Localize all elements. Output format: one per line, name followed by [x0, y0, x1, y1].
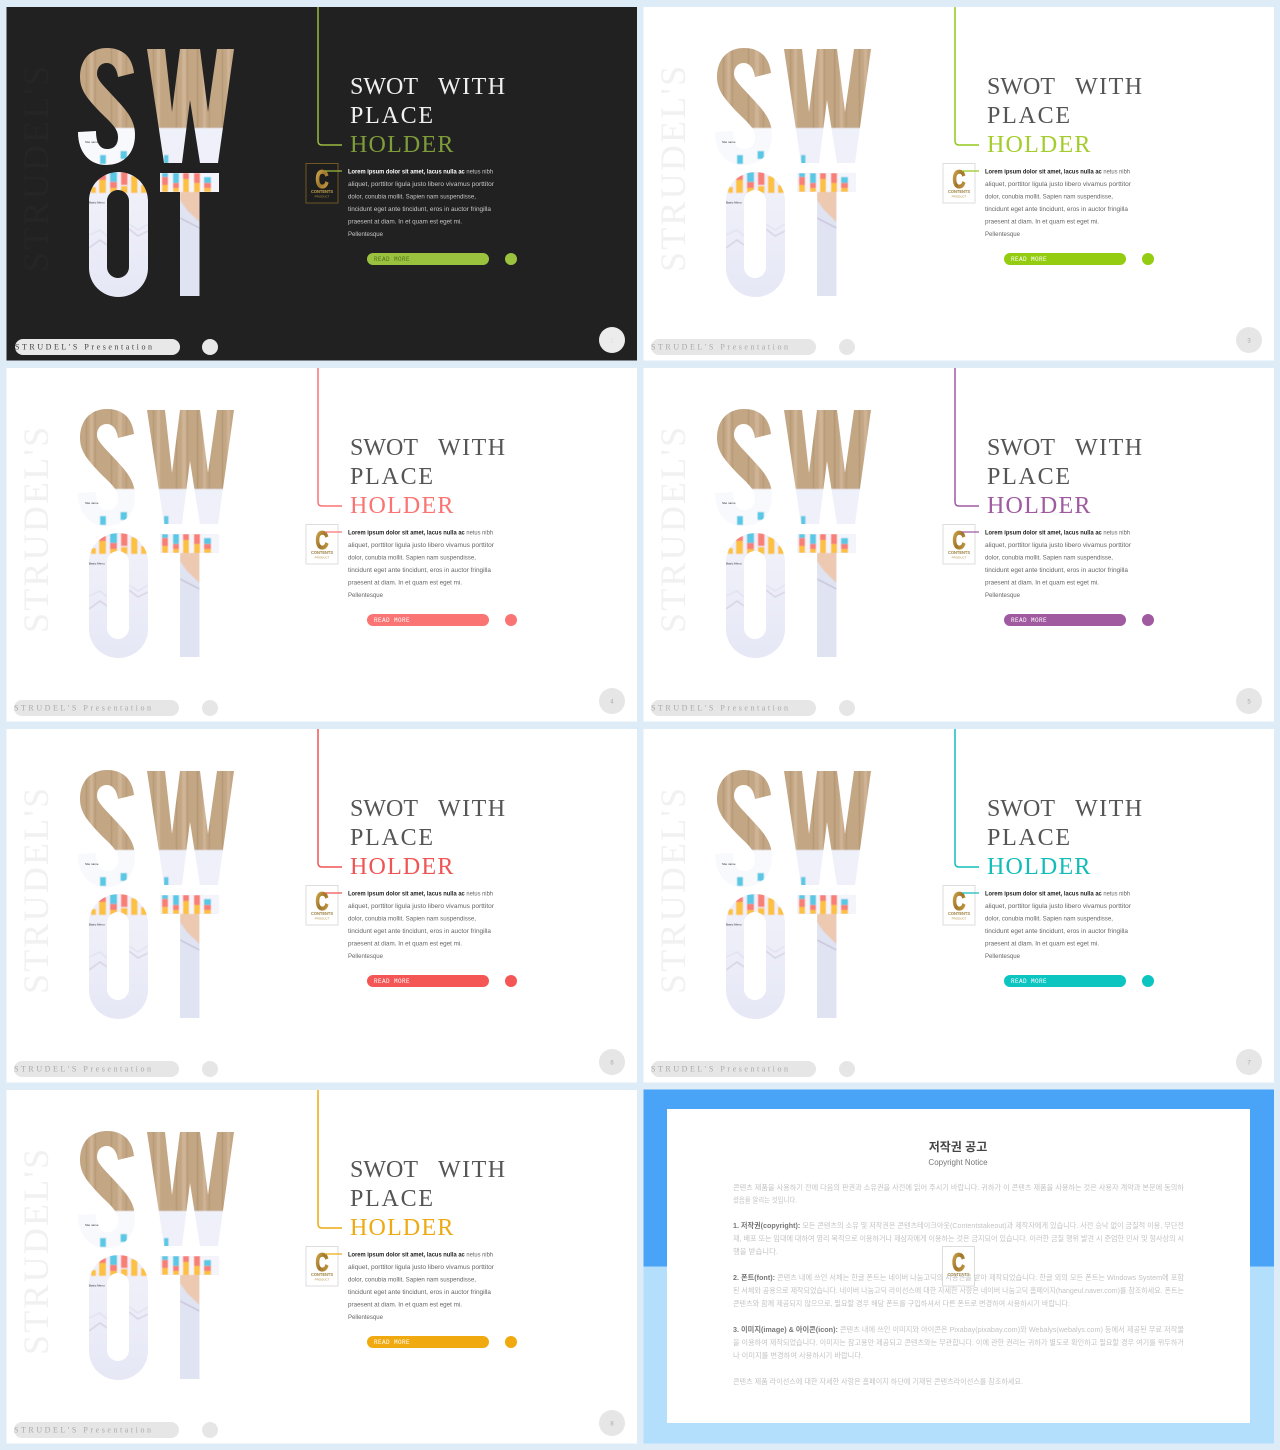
accent connector [955, 729, 979, 867]
body text: Pellentesque [348, 592, 384, 599]
logo: PRODUCT [952, 916, 967, 920]
title: PLACE [987, 103, 1072, 129]
title: SWOT [350, 435, 418, 461]
read more button [367, 1336, 489, 1348]
body text [348, 1252, 494, 1321]
chart label: Basic Menu [89, 200, 105, 204]
read more button [1004, 975, 1126, 987]
logo: C [316, 887, 329, 916]
title [987, 435, 1144, 519]
image and icon clause [733, 1324, 1184, 1360]
logo: CONTENTS [311, 550, 333, 555]
accent dot [1142, 253, 1154, 265]
body text: tincidunt eget ante tincidunt, eros in auctor fringilla [985, 928, 1129, 935]
SWOT image letters [707, 401, 882, 664]
title [350, 74, 507, 158]
title: SWOT [987, 796, 1055, 822]
slide 4: purple [644, 368, 1274, 722]
body text: praesent at diam. In et quam est eget mi. [348, 1302, 462, 1308]
page number [599, 1410, 625, 1436]
chart label: Basic Menu [726, 200, 742, 204]
logo: C [316, 1248, 329, 1277]
accent connector [955, 368, 979, 506]
read more button: READ MORE [374, 1339, 410, 1346]
body text [985, 890, 1131, 960]
accent connector [318, 1090, 342, 1228]
footer pill [15, 339, 180, 355]
read more button: READ MORE [374, 978, 410, 985]
title: PLACE [350, 103, 435, 129]
chart label: Basic Menu [726, 562, 742, 566]
body text: Lorem ipsum dolor sit amet, lacus nulla ac netus nibh [348, 890, 494, 898]
body text: Pellentesque [348, 231, 384, 238]
logo: PRODUCT [315, 916, 330, 920]
read more button [367, 975, 489, 987]
title: PLACE [350, 464, 435, 490]
title: SWOT [350, 1157, 418, 1183]
page number [1236, 1049, 1262, 1075]
footer dot [202, 1422, 218, 1438]
body text: Pellentesque [985, 953, 1021, 960]
title: WITH [438, 74, 507, 100]
copyright clause: 1. 저작권(copyright): 모든 콘텐츠의 소유 및 저작권은 콘텐츠테이크아웃(Contentstakeout)과 제작자에게 있습니다. 사전 승낙 없이 금칠적 이용, 무단전 [733, 1220, 1184, 1230]
body text: aliquet, porttitor ligula justo libero vivamus porttitor [348, 903, 494, 910]
vertical watermark: STRUDEL'S [653, 64, 693, 272]
footer pill [14, 1422, 179, 1438]
title: PLACE [350, 825, 435, 851]
slide 1: dark olive [6, 7, 637, 360]
body text: tincidunt eget ante tincidunt, eros in auctor fringilla [348, 206, 492, 213]
blue top band [644, 1090, 1274, 1266]
read more button: READ MORE [374, 617, 410, 624]
read more button [1004, 253, 1126, 265]
title: PLACE [987, 464, 1072, 490]
accent connector [318, 729, 342, 867]
footer pill [651, 1061, 816, 1077]
title: SWOT [987, 435, 1055, 461]
chart label: Site name [85, 862, 99, 866]
chart label: Site name [722, 501, 736, 505]
SWOT image letters [707, 762, 882, 1025]
accent connector [318, 368, 342, 506]
logo: C [316, 526, 329, 555]
logo [943, 886, 975, 925]
logo: PRODUCT [315, 1278, 330, 1282]
title: WITH [438, 796, 507, 822]
logo [306, 1246, 338, 1286]
body text: praesent at diam. In et quam est eget mi. [348, 940, 462, 948]
chart label: Site name [722, 140, 736, 144]
page number: 3 [1247, 338, 1251, 344]
logo: C [316, 165, 329, 194]
body text [985, 530, 1131, 599]
chart label: Basic Menu [89, 1284, 105, 1288]
logo: PRODUCT [952, 194, 967, 198]
body text: praesent at diam. In et quam est eget mi. [985, 218, 1099, 226]
vertical watermark: STRUDEL'S [16, 1147, 56, 1355]
vertical watermark: STRUDEL'S [16, 786, 56, 994]
logo: CONTENTS [948, 911, 970, 916]
title [350, 796, 507, 880]
image and icon clause: 3. 이미지(image) & 아이콘(icon): 콘텐츠 내에 쓰인 이미지와 아이콘은 Pixabay(pixabay.com)와 Webalys(webalys.com) 등에서 제공된 무료 저작물 [733, 1324, 1184, 1334]
body text: dolor, conubia mollit. Sapien nam suspendisse, [985, 194, 1113, 200]
chart label: Site name [85, 140, 99, 144]
accent dot [505, 975, 517, 987]
logo [306, 164, 338, 203]
footer pill [651, 700, 816, 716]
body text: dolor, conubia mollit. Sapien nam suspendisse, [985, 916, 1113, 922]
logo lead line [325, 531, 342, 533]
chart label: Basic Menu [726, 922, 742, 926]
vertical watermark: STRUDEL'S [16, 64, 56, 272]
intro paragraph [733, 1182, 1184, 1204]
intro paragraph: 콘텐츠 제품을 사용하기 전에 다음의 판권과 소유권을 사전에 읽어 주시기 바랍니다. 귀하가 이 콘텐츠 제품을 사용하는 것은 사용자 계약과 본문에 동의하 [733, 1182, 1184, 1192]
body text: Pellentesque [985, 592, 1021, 599]
logo: C [952, 1248, 965, 1277]
footer pill: STRUDEL'S Presentation [14, 704, 151, 712]
body text [985, 168, 1131, 238]
slide 6: teal [644, 729, 1274, 1082]
logo: PRODUCT [315, 194, 330, 198]
footer pill: STRUDEL'S Presentation [651, 1064, 788, 1074]
body text: aliquet, porttitor ligula justo libero vivamus porttitor [348, 542, 494, 549]
accent connector [318, 7, 342, 145]
body text: Lorem ipsum dolor sit amet, lacus nulla ac netus nibh [348, 168, 494, 176]
footer pill: STRUDEL'S Presentation [15, 342, 152, 352]
body text: Lorem ipsum dolor sit amet, lacus nulla ac netus nibh [348, 530, 494, 536]
footer dot [839, 339, 855, 355]
footer pill: STRUDEL'S Presentation [14, 1064, 151, 1074]
notice title: 저작권 공고 [929, 1139, 987, 1154]
body text: aliquet, porttitor ligula justo libero vivamus porttitor [985, 181, 1131, 188]
copyright clause: 재, 배포 또는 임대에 대하여 영리 목적으로 이용하거나 제삼자에게 이용하는 것은 금지되어 있습니다. 이러한 금칠 행위 발견 시 준엄한 민사 및 형사상의 시 [733, 1233, 1184, 1243]
logo: C [953, 165, 966, 194]
SWOT image letters [70, 1123, 245, 1386]
read more button: READ MORE [1011, 256, 1047, 263]
title: WITH [1075, 435, 1144, 461]
body text: tincidunt eget ante tincidunt, eros in auctor fringilla [348, 1289, 492, 1296]
body text: dolor, conubia mollit. Sapien nam suspendisse, [348, 554, 476, 562]
footer dot [202, 339, 218, 355]
read more button: READ MORE [1011, 617, 1047, 624]
footer pill: STRUDEL'S Presentation [14, 1426, 151, 1434]
page number: 2 [610, 338, 614, 344]
footer pill [14, 700, 179, 716]
slide 8: copyright notice [644, 1090, 1274, 1444]
title [987, 796, 1144, 880]
body text: Pellentesque [985, 231, 1021, 238]
accent connector [955, 7, 979, 145]
body text: dolor, conubia mollit. Sapien nam suspendisse, [348, 916, 476, 922]
footer dot [839, 1061, 855, 1077]
page number: 7 [1247, 1060, 1251, 1066]
body text: dolor, conubia mollit. Sapien nam suspendisse, [985, 554, 1113, 562]
title: HOLDER [987, 493, 1092, 519]
body text: tincidunt eget ante tincidunt, eros in auctor fringilla [348, 928, 492, 935]
body text: dolor, conubia mollit. Sapien nam suspendisse, [348, 194, 476, 200]
logo: CONTENTS [311, 1272, 333, 1277]
body text: aliquet, porttitor ligula justo libero vivamus porttitor [985, 542, 1131, 549]
title [987, 74, 1144, 158]
logo: CONTENTS [948, 1272, 970, 1277]
logo lead line [962, 531, 979, 533]
font clause: 2. 폰트(font): 콘텐츠 내에 쓰인 서체는 한글 폰트는 네이버 나눔고딕의 사용권을 받아 제작되었습니다. 한글 외의 모든 폰트는 Windows System에 포함 [733, 1272, 1184, 1282]
title: HOLDER [350, 1215, 455, 1241]
SWOT image letters [70, 762, 245, 1025]
body text: tincidunt eget ante tincidunt, eros in auctor fringilla [985, 206, 1129, 213]
title: HOLDER [987, 132, 1092, 158]
logo: CONTENTS [948, 189, 970, 194]
slide 3: salmon [6, 368, 637, 722]
accent dot [505, 253, 517, 265]
logo: CONTENTS [948, 550, 970, 555]
chart label: Site name [85, 501, 99, 505]
title: SWOT [987, 74, 1055, 100]
logo [943, 524, 975, 564]
title: SWOT [350, 796, 418, 822]
slide 2: lime [644, 7, 1274, 360]
title: HOLDER [350, 132, 455, 158]
footer dot [202, 1061, 218, 1077]
title: WITH [1075, 74, 1144, 100]
image and icon clause: 을 이용하여 제작되었습니다. 이미지는 참고용만 제공되고 콘텐츠와는 무관합니다. 이에 관한 권리는 귀하가 별도로 확인하고 필요할 경우 여기를 위두하거 [733, 1337, 1184, 1347]
vertical watermark: STRUDEL'S [16, 425, 56, 633]
logo lead line [962, 170, 979, 172]
body text: dolor, conubia mollit. Sapien nam suspendisse, [348, 1276, 476, 1284]
SWOT image letters [707, 40, 882, 303]
body text [348, 890, 494, 960]
title: HOLDER [350, 493, 455, 519]
body text: Lorem ipsum dolor sit amet, lacus nulla ac netus nibh [985, 530, 1131, 536]
vertical watermark: STRUDEL'S [653, 786, 693, 994]
chart label: Basic Menu [89, 562, 105, 566]
logo: CONTENTS [311, 911, 333, 916]
body text: tincidunt eget ante tincidunt, eros in auctor fringilla [985, 567, 1129, 574]
page number: 6 [610, 1060, 614, 1066]
body text: aliquet, porttitor ligula justo libero vivamus porttitor [348, 181, 494, 188]
page number [1236, 688, 1262, 714]
body text: Pellentesque [348, 953, 384, 960]
title [350, 1157, 507, 1241]
body text: tincidunt eget ante tincidunt, eros in auctor fringilla [348, 567, 492, 574]
image and icon clause: 나 이미지를 변경하여 사용하시기 바랍니다. [733, 1350, 863, 1360]
font clause: 콘텐츠와 함께 제공되지 않으므로, 필요할 경우 해당 폰트를 구입하셔서 다른 폰트로 변경하여 사용하시기 바랍니다. [733, 1298, 1070, 1308]
title: PLACE [987, 825, 1072, 851]
accent dot [1142, 614, 1154, 626]
logo lead line [325, 892, 342, 894]
body text [348, 530, 494, 599]
logo lead line [325, 1253, 342, 1255]
logo [943, 164, 975, 203]
logo [306, 524, 338, 564]
chart label: Site name [85, 1223, 99, 1227]
read more button [367, 253, 489, 265]
title: SWOT [350, 74, 418, 100]
logo lead line [325, 170, 342, 172]
logo lead line [962, 892, 979, 894]
chart label: Basic Menu [89, 922, 105, 926]
title: PLACE [350, 1186, 435, 1212]
page number [599, 327, 625, 353]
slide 5: red [6, 729, 637, 1082]
logo: C [953, 526, 966, 555]
body text: praesent at diam. In et quam est eget mi. [348, 218, 462, 226]
logo [306, 886, 338, 925]
read more button [367, 614, 489, 626]
vertical watermark: STRUDEL'S [653, 425, 693, 633]
footer pill [651, 339, 816, 355]
copyright clause [733, 1220, 1184, 1256]
light blue bottom band [644, 1266, 1274, 1444]
SWOT image letters [70, 40, 245, 303]
read more button [1004, 614, 1126, 626]
closing line: 콘텐츠 제품 라이선스에 대한 자세한 사항은 홈페이지 하단에 기재된 콘텐츠라이선스를 참조하세요. [733, 1376, 1023, 1386]
title: WITH [438, 435, 507, 461]
logo: PRODUCT [952, 556, 967, 560]
notice subtitle: Copyright Notice [928, 1158, 988, 1167]
title: HOLDER [987, 854, 1092, 880]
logo [942, 1246, 974, 1286]
read more button: READ MORE [374, 256, 410, 263]
body text: Pellentesque [348, 1314, 384, 1321]
footer pill: STRUDEL'S Presentation [651, 704, 788, 712]
body text: praesent at diam. In et quam est eget mi. [985, 580, 1099, 586]
logo: PRODUCT [315, 556, 330, 560]
read more button: READ MORE [1011, 978, 1047, 985]
copyright clause: 행을 받습니다. [733, 1246, 778, 1256]
title: HOLDER [350, 854, 455, 880]
footer pill [14, 1061, 179, 1077]
page number: 5 [1247, 700, 1251, 706]
logo: CONTENTS [311, 189, 333, 194]
white notice panel [667, 1109, 1250, 1423]
body text: praesent at diam. In et quam est eget mi. [348, 580, 462, 586]
slide 7: orange [6, 1090, 637, 1444]
accent dot [505, 1336, 517, 1348]
body text: Lorem ipsum dolor sit amet, lacus nulla ac netus nibh [985, 168, 1131, 176]
title: WITH [438, 1157, 507, 1183]
font clause [733, 1272, 1184, 1308]
title [350, 435, 507, 519]
page number: 8 [610, 1422, 614, 1428]
page number [599, 688, 625, 714]
SWOT image letters [70, 401, 245, 664]
page number: 4 [610, 700, 614, 706]
body text [348, 168, 494, 238]
intro paragraph: 셨음을 알리는 것입니다. [733, 1194, 797, 1204]
accent dot [1142, 975, 1154, 987]
logo: C [953, 887, 966, 916]
body text: Lorem ipsum dolor sit amet, lacus nulla ac netus nibh [348, 1252, 494, 1258]
body text: aliquet, porttitor ligula justo libero vivamus porttitor [348, 1264, 494, 1271]
footer dot [202, 700, 218, 716]
accent dot [505, 614, 517, 626]
footer dot [839, 700, 855, 716]
footer pill: STRUDEL'S Presentation [651, 342, 788, 352]
chart label: Site name [722, 862, 736, 866]
body text: praesent at diam. In et quam est eget mi. [985, 940, 1099, 948]
font clause: 된 서체와 공용으로 제작되었습니다. 네이버 나눔고딕 라이선스에 대한 자세한 사항은 네이버 나눔고딕 홈페이지(hangeul.naver.com)를 참조하세요. 폰트는 [733, 1285, 1184, 1295]
body text: Lorem ipsum dolor sit amet, lacus nulla ac netus nibh [985, 890, 1131, 898]
page number [599, 1049, 625, 1075]
title: WITH [1075, 796, 1144, 822]
page number [1236, 327, 1262, 353]
body text: aliquet, porttitor ligula justo libero vivamus porttitor [985, 903, 1131, 910]
